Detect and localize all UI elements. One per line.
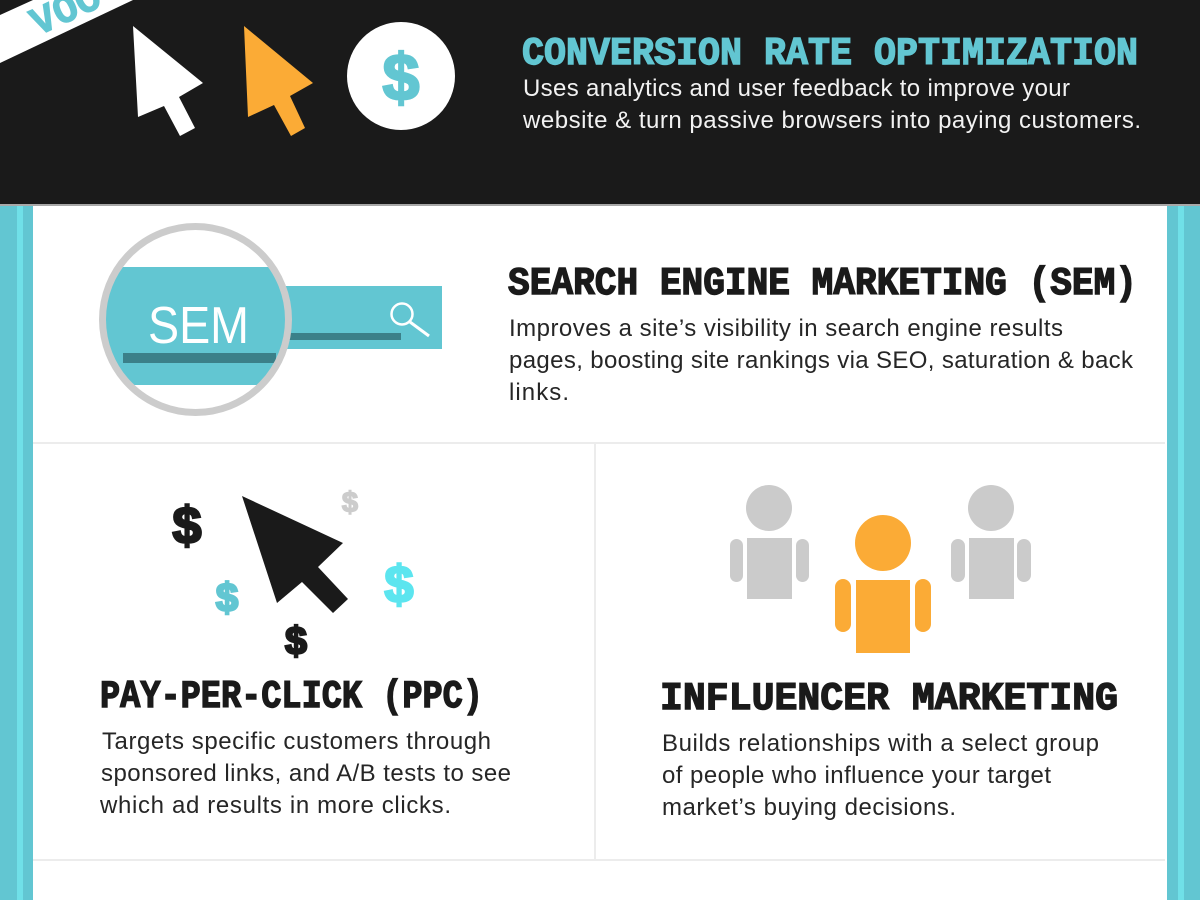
- icon: black cursor with dollars: $: [285, 620, 307, 663]
- text: conversion rate description: [522, 75, 1141, 134]
- divider lines: [33, 442, 1165, 861]
- icon: right grey person: [951, 485, 1031, 599]
- text: influencer description: of people who influence your target: [662, 762, 1051, 789]
- icon: three people: [730, 485, 1031, 653]
- icon: black cursor with dollars: [173, 487, 414, 663]
- panel: pay-per-click: [99, 487, 511, 819]
- text: PPC description: which ad results in more clicks.: [99, 792, 451, 819]
- icon: dollar coin: $: [383, 40, 419, 114]
- text: SEM description: [509, 315, 1134, 406]
- icon: orange person: [835, 515, 931, 653]
- icon: black cursor with dollars: $: [216, 576, 238, 620]
- icon: black cursor with dollars: $: [342, 487, 358, 519]
- icon: SEM magnifier over search bar: [99, 226, 442, 412]
- heading: conversion rate optimization: CONVERSION RATE OPTIMIZATION: [522, 32, 1138, 76]
- ribbon: vocabulary corner tag: [0, 0, 133, 63]
- panel: right teal sidebar: [1167, 206, 1200, 900]
- text: PPC description: Targets specific customers through: [102, 728, 491, 755]
- icon: dollar coin: [347, 22, 455, 130]
- text: conversion rate description: website & turn passive browsers into paying customers.: [522, 107, 1141, 134]
- heading: PPC: PAY-PER-CLICK (PPC): [100, 675, 483, 719]
- icon: black cursor with dollars: $: [385, 556, 414, 614]
- text: influencer description: [662, 730, 1099, 821]
- heading: influencer marketing: INFLUENCER MARKETING: [660, 677, 1118, 721]
- panel: influencer marketing: [660, 485, 1118, 821]
- text: SEM description: links.: [509, 379, 569, 406]
- panel: left teal sidebar: [0, 206, 33, 900]
- panel: dark header: [0, 0, 1200, 206]
- text: PPC description: sponsored links, and A/B tests to see: [101, 760, 511, 787]
- panel: search engine marketing: [99, 226, 1137, 412]
- text: PPC description: [99, 728, 511, 819]
- text: conversion rate description: Uses analytics and user feedback to improve your: [523, 75, 1070, 102]
- icon: left grey person: [730, 485, 809, 599]
- heading: SEM: SEARCH ENGINE MARKETING (SEM): [508, 262, 1137, 306]
- text: influencer description: Builds relationships with a select group: [662, 730, 1099, 757]
- text: SEM description: Improves a site’s visibility in search engine results: [509, 315, 1063, 342]
- icon: white cursor: [133, 26, 203, 136]
- icon: SEM magnifier over search bar: SEM: [148, 297, 249, 355]
- text: SEM description: pages, boosting site rankings via SEO, saturation & back: [509, 347, 1134, 374]
- text: influencer description: market’s buying decisions.: [662, 794, 956, 821]
- icon: orange cursor: [244, 26, 313, 136]
- icon: black cursor with dollars: $: [173, 497, 202, 555]
